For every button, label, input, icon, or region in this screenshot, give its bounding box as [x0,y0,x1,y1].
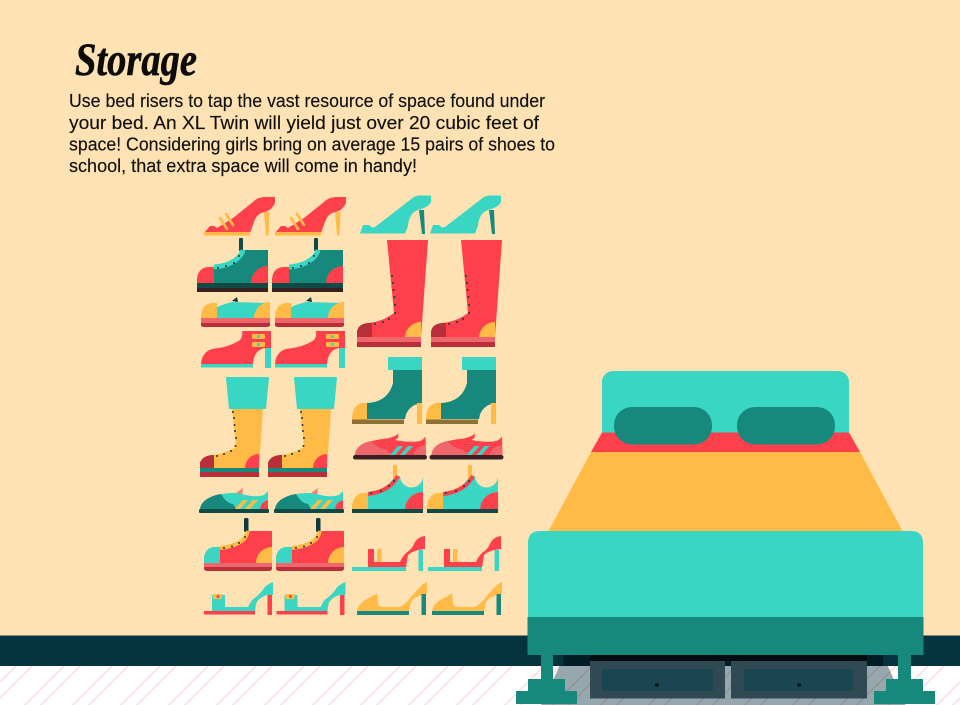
right pillow [737,407,835,444]
right storage drawer [731,661,867,698]
icon: pair of tall red boots [357,240,502,347]
text block: storage description: space! Considering girls bring on average 15 pairs of shoes to [69,134,555,154]
icon: pair of teal high-top shoes [352,465,498,513]
icon: pair of red sneakers [353,433,504,460]
dark skirting band [0,636,960,666]
icon: pair of red ankle boots [204,518,344,571]
bed illustration [516,371,935,705]
text block: storage description: Use bed risers to tap the vast resource of space found under [69,91,545,111]
floor with diagonal hatch [0,666,960,705]
icon: pair of red strap sandals [352,536,501,571]
icon: pair of yellow boots with teal cuffs [200,377,337,477]
red sheet [591,432,860,452]
icon: pair of teal sneakers [199,488,344,513]
left bed riser and leg [516,655,577,704]
bed base [528,617,924,655]
yellow blanket [548,452,903,532]
text block: storage description: school, that extra space will come in handy! [69,156,417,176]
icon: pair of teal flat shoes [201,297,344,327]
icon: pair of green ankle boots [197,238,343,292]
icon: pair of teal sandals [204,582,346,615]
text block: storage description [69,91,555,176]
text block: storage description: your bed. An XL Twin will yield just over 20 cubic feet of [69,113,540,133]
headboard [602,371,849,441]
mattress [528,531,923,617]
right bed riser and leg [874,655,935,704]
left pillow [614,407,712,444]
icon: pair of red buckled heels [201,331,345,368]
title: Storage [75,34,197,86]
under-bed shadow [541,655,905,705]
icon: pair of teal heels [360,195,501,234]
left storage drawer [590,661,725,698]
icon: pair of yellow heels [357,582,502,615]
icon: pair of red heels [204,197,346,236]
icon: pair of green heeled boots [352,357,496,424]
